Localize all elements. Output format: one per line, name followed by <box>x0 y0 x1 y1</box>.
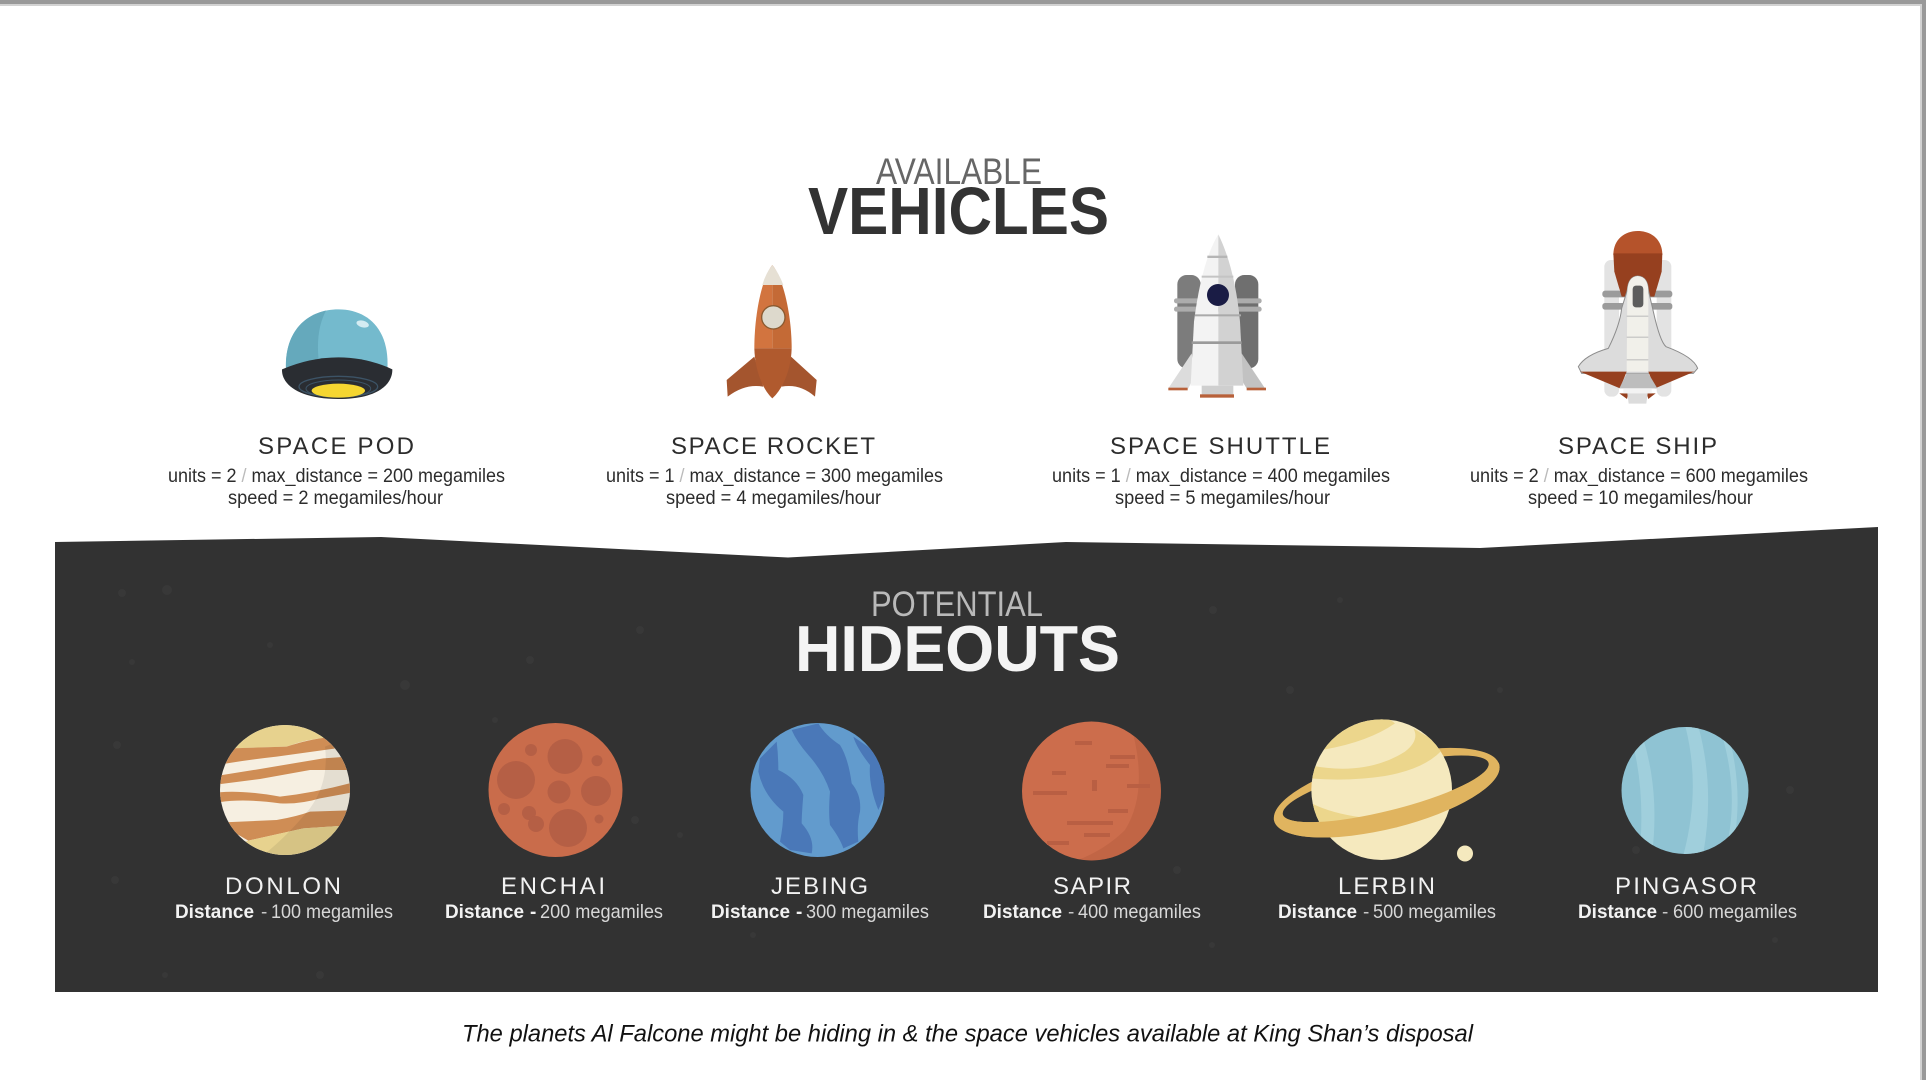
planet label: Jebing: JEBING <box>771 873 868 900</box>
planet label: Donlon: - <box>261 902 267 923</box>
vehicle text: space pod <box>168 433 505 509</box>
vehicle text: space pod: speed = 2 megamiles/hour <box>228 487 443 509</box>
planet label: Lerbin <box>1278 873 1496 923</box>
planet label: Pingasor: 600 megamiles <box>1673 901 1797 923</box>
vehicle text: space rocket: SPACE ROCKET <box>671 433 875 460</box>
planet label: Lerbin: 500 megamiles <box>1373 901 1496 923</box>
vehicle text: space shuttle: speed = 5 megamiles/hour <box>1115 487 1330 509</box>
heading: potential hideouts: HIDEOUTS <box>795 612 1120 685</box>
planet label: Donlon: Distance <box>175 901 254 923</box>
planet label: Pingasor <box>1578 873 1797 923</box>
planet label: Sapir: SAPIR <box>1053 873 1131 900</box>
planet label: Donlon <box>175 873 393 923</box>
planet label: Pingasor: PINGASOR <box>1615 873 1757 900</box>
icon: space shuttle <box>1168 234 1266 398</box>
planet label: Pingasor: Distance <box>1578 901 1657 923</box>
planet label: Sapir <box>983 873 1201 923</box>
planet label: Enchai: 200 megamiles <box>540 901 663 923</box>
planet label: Lerbin: LERBIN <box>1338 873 1435 900</box>
vehicle text: space pod: SPACE POD <box>258 433 414 460</box>
panel: potential hideouts background <box>55 527 1878 992</box>
planet: Lerbin with ring and moon <box>1274 719 1500 862</box>
planet label: Donlon: 100 megamiles <box>271 901 393 923</box>
vehicle text: space shuttle: units = 1 / max_distance = 400 megamiles <box>1052 465 1390 487</box>
icon: space pod <box>280 307 392 399</box>
vehicle text: space ship <box>1470 433 1808 509</box>
vehicle text: space ship: SPACE SHIP <box>1558 433 1717 460</box>
vehicle text: space rocket: units = 1 / max_distance = 300 megamiles <box>606 465 943 487</box>
heading: potential hideouts: POTENTIAL <box>871 585 1043 624</box>
planet label: Lerbin: Distance <box>1278 901 1357 923</box>
planet label: Donlon: DONLON <box>225 873 341 900</box>
planet: Jebing <box>750 723 887 857</box>
vehicle text: space rocket <box>606 433 943 509</box>
planet label: Enchai: Distance <box>445 901 524 923</box>
planet: Donlon <box>217 722 353 858</box>
planet label: Lerbin: - <box>1363 902 1369 923</box>
heading: available vehicles: VEHICLES <box>808 174 1109 249</box>
planet label: Enchai: - <box>530 902 536 923</box>
caption: The planets Al Falcone might be hiding in & the space vehicles available at King Shan’s disposal <box>462 1020 1474 1048</box>
planet: Sapir <box>1022 722 1170 866</box>
planet label: Jebing: Distance <box>711 901 790 923</box>
icon: space rocket <box>727 265 817 398</box>
planet label: Sapir: 400 megamiles <box>1078 901 1201 923</box>
vehicle text: space rocket: speed = 4 megamiles/hour <box>666 487 881 509</box>
planet label: Sapir: Distance <box>983 901 1062 923</box>
vehicle text: space ship: units = 2 / max_distance = 600 megamiles <box>1470 465 1808 487</box>
vehicle text: space pod: units = 2 / max_distance = 200 megamiles <box>168 465 505 487</box>
planet: Pingasor <box>1622 725 1748 860</box>
vehicle text: space shuttle: SPACE SHUTTLE <box>1110 433 1330 460</box>
icon: space ship <box>1578 231 1698 404</box>
planet label: Enchai <box>445 873 663 923</box>
planet label: Pingasor: - <box>1662 902 1668 923</box>
planet label: Enchai: ENCHAI <box>501 873 605 900</box>
planet label: Sapir: - <box>1068 902 1074 923</box>
planet: Enchai <box>488 723 622 857</box>
vehicle text: space shuttle <box>1052 433 1390 509</box>
planet label: Jebing: 300 megamiles <box>806 901 929 923</box>
heading: available vehicles: AVAILABLE <box>876 151 1042 192</box>
vehicle text: space ship: speed = 10 megamiles/hour <box>1528 487 1753 509</box>
planet label: Jebing: - <box>796 902 802 923</box>
planet label: Jebing <box>711 873 929 923</box>
